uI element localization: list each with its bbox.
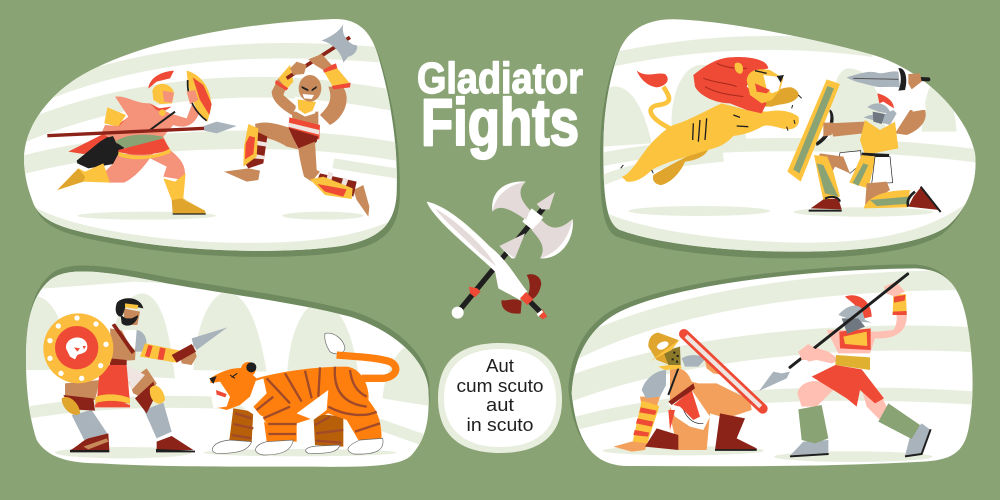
icon: maroon guard: [501, 274, 541, 314]
panel: gladiator with spear versus axe fighter: [17, 19, 407, 263]
lion figure: [621, 57, 802, 185]
title: Gladiator: [417, 54, 583, 103]
icon: crossed sword and axe: [427, 181, 573, 319]
shield gladiator figure: [43, 298, 227, 452]
quote bubble: [438, 343, 562, 453]
spear gladiator figure: [47, 71, 237, 214]
quote text: Aut: [486, 356, 514, 376]
kneeling gladiator figure: [613, 333, 763, 452]
axe fighter figure: [224, 24, 369, 217]
quote text: cum scuto: [456, 376, 544, 396]
tiger figure: [209, 333, 396, 455]
icon: axe: [452, 181, 573, 319]
quote text: aut: [486, 395, 514, 415]
panel: kneeling gladiator versus spear warrior: [567, 264, 980, 466]
panel: gladiator with skull shield versus tiger: [23, 266, 433, 467]
quote text: in scuto: [466, 415, 534, 435]
quote text: [456, 356, 544, 435]
panel: lion versus gladiator: [600, 19, 983, 263]
kneeling gladiator figure: [787, 68, 941, 212]
icon: sword: [427, 202, 547, 319]
title: [417, 54, 583, 159]
title: Fights: [421, 85, 579, 159]
spear warrior figure: [759, 274, 931, 456]
